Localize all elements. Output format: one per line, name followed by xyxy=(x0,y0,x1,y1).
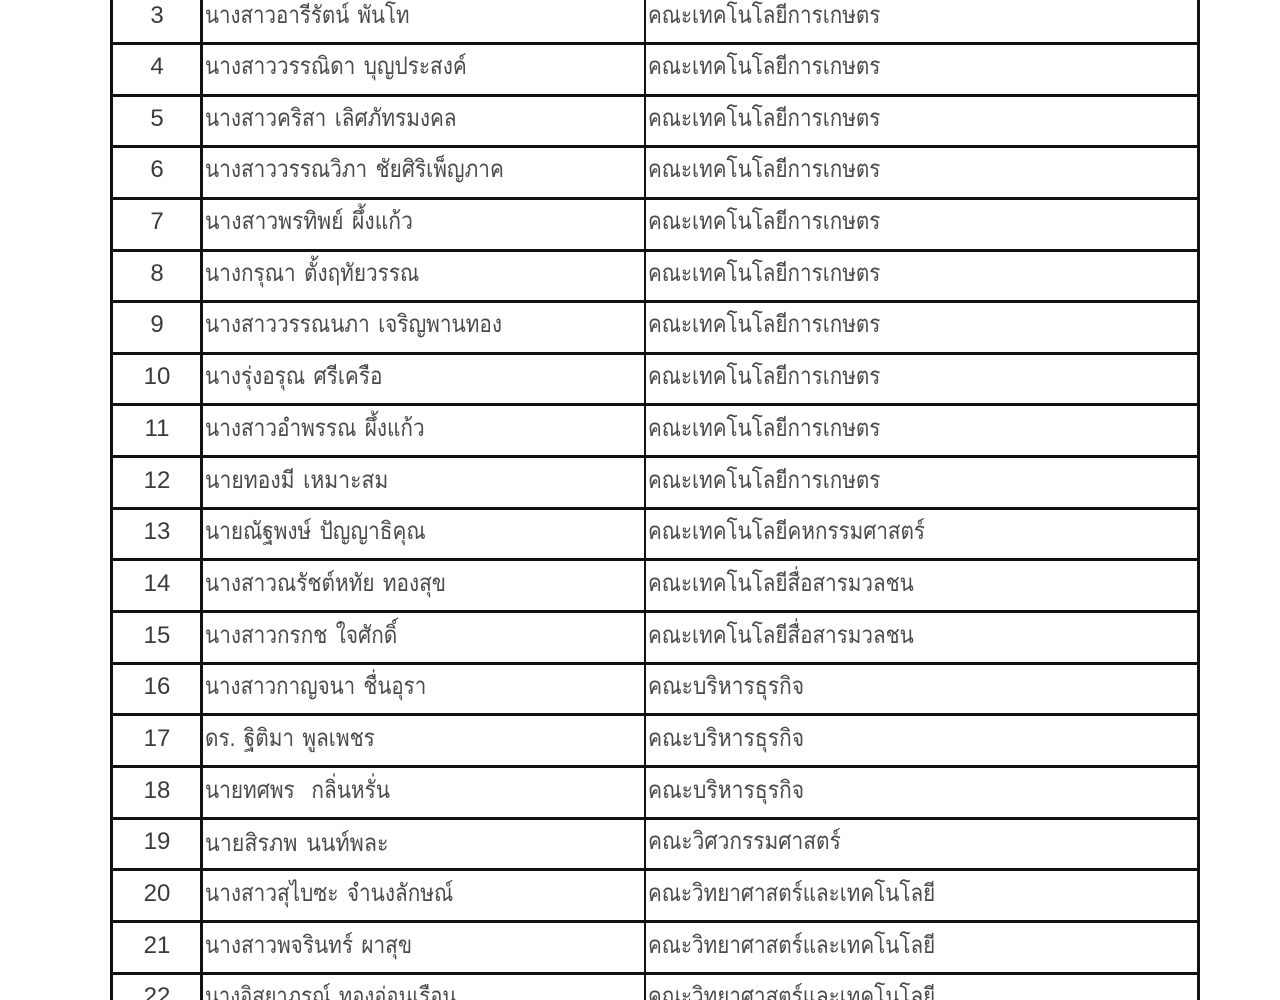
row 14: 14 xyxy=(144,570,170,597)
row 4: นางสาววรรณิดา บุญประสงค์ xyxy=(205,53,467,80)
row 8: คณะเทคโนโลยีการเกษตร xyxy=(648,260,880,287)
row 21: 21 xyxy=(144,932,170,959)
row 12: 12 xyxy=(144,467,170,494)
row 20: นางสาวสุไบซะ จำนงลักษณ์ xyxy=(205,880,453,907)
row 6: นางสาววรรณวิภา ชัยศิริเพ็ญภาค xyxy=(205,156,504,183)
row 7: นางสาวพรทิพย์ ผึ้งแก้ว xyxy=(205,208,413,235)
row 16: คณะบริหารธุรกิจ xyxy=(648,673,804,700)
row 10: นางรุ่งอรุณ ศรีเครือ xyxy=(205,363,382,390)
row 7 xyxy=(150,204,880,235)
row 4 xyxy=(150,52,880,80)
row 20 xyxy=(144,879,935,908)
row 5 xyxy=(150,104,880,132)
row 12: คณะเทคโนโลยีการเกษตร xyxy=(648,467,880,494)
row 8: นางกรุณา ตั้งฤทัยวรรณ xyxy=(205,260,419,287)
row 17: ดร. ฐิติมา พูลเพชร xyxy=(205,725,375,752)
row 5: 5 xyxy=(150,105,164,132)
row 15: คณะเทคโนโลยีสื่อสารมวลชน xyxy=(648,622,914,649)
row 13: คณะเทคโนโลยีคหกรรมศาสตร์ xyxy=(648,518,925,545)
row 20: คณะวิทยาศาสตร์และเทคโนโลยี xyxy=(648,880,935,907)
row 21 xyxy=(144,931,935,960)
row 12: นายทองมี เหมาะสม xyxy=(205,467,388,494)
row 13: นายณัฐพงษ์ ปัญญาธิคุณ xyxy=(205,518,426,545)
row 10 xyxy=(144,362,880,390)
row 3: 3 xyxy=(150,2,164,29)
row 8: 8 xyxy=(150,260,164,287)
row 22 xyxy=(144,982,935,1000)
row 12 xyxy=(144,466,880,494)
row 18: คณะบริหารธุรกิจ xyxy=(648,777,804,804)
row 15 xyxy=(144,618,914,649)
row 13 xyxy=(144,517,925,546)
row 20: 20 xyxy=(144,880,170,907)
row 14: นางสาวณรัชต์หทัย ทองสุข xyxy=(205,570,446,597)
row 9: 9 xyxy=(150,311,164,338)
row 21: นางสาวพจรินทร์ ผาสุข xyxy=(205,932,412,959)
row 6 xyxy=(150,154,880,183)
row 5: คณะเทคโนโลยีการเกษตร xyxy=(648,105,880,132)
row 11: คณะเทคโนโลยีการเกษตร xyxy=(648,415,880,442)
row 3 xyxy=(150,1,880,29)
row 6: คณะเทคโนโลยีการเกษตร xyxy=(648,156,880,183)
row 16: นางสาวกาญจนา ชื่นอุรา xyxy=(205,673,426,700)
row 11 xyxy=(145,410,880,442)
row 11: 11 xyxy=(145,415,169,442)
row 19 xyxy=(144,828,841,857)
row 15: นางสาวกรกช ใจศักดิ์ xyxy=(205,622,397,649)
row 11: นางสาวอำพรรณ ผึ้งแก้ว xyxy=(205,415,425,442)
row 19: 19 xyxy=(144,828,170,855)
row 4: 4 xyxy=(150,53,164,80)
row 18: 18 xyxy=(144,777,170,804)
row 7: คณะเทคโนโลยีการเกษตร xyxy=(648,208,880,235)
row 19: คณะวิศวกรรมศาสตร์ xyxy=(648,828,841,855)
row 15: 15 xyxy=(144,622,170,649)
row 21: คณะวิทยาศาสตร์และเทคโนโลยี xyxy=(648,932,935,959)
row 17: 17 xyxy=(144,725,170,752)
row 14 xyxy=(144,566,914,598)
row 17: คณะบริหารธุรกิจ xyxy=(648,725,804,752)
row 8 xyxy=(150,256,880,288)
row 16: 16 xyxy=(144,673,170,700)
row 16 xyxy=(144,669,804,700)
row 18: นายทศพร กลิ่นหรั่น xyxy=(205,777,390,804)
row 18 xyxy=(144,773,804,804)
row 9: นางสาววรรณนภา เจริญพานทอง xyxy=(205,311,502,338)
row 17 xyxy=(144,725,804,752)
row 10: 10 xyxy=(144,363,170,390)
row 13: 13 xyxy=(144,518,170,545)
row 9 xyxy=(150,310,880,338)
row 9: คณะเทคโนโลยีการเกษตร xyxy=(648,311,880,338)
row 6: 6 xyxy=(150,156,164,183)
row 3: คณะเทคโนโลยีการเกษตร xyxy=(648,2,880,29)
row 19: นายสิรภพ นนท์พละ xyxy=(205,830,389,857)
row 5: นางสาวคริสา เลิศภัทรมงคล xyxy=(205,105,457,132)
row 14: คณะเทคโนโลยีสื่อสารมวลชน xyxy=(648,570,914,597)
row 4: คณะเทคโนโลยีการเกษตร xyxy=(648,53,880,80)
row 3: นางสาวอารีรัตน์ พันโท xyxy=(205,2,410,29)
row 10: คณะเทคโนโลยีการเกษตร xyxy=(648,363,880,390)
row 7: 7 xyxy=(150,208,164,235)
